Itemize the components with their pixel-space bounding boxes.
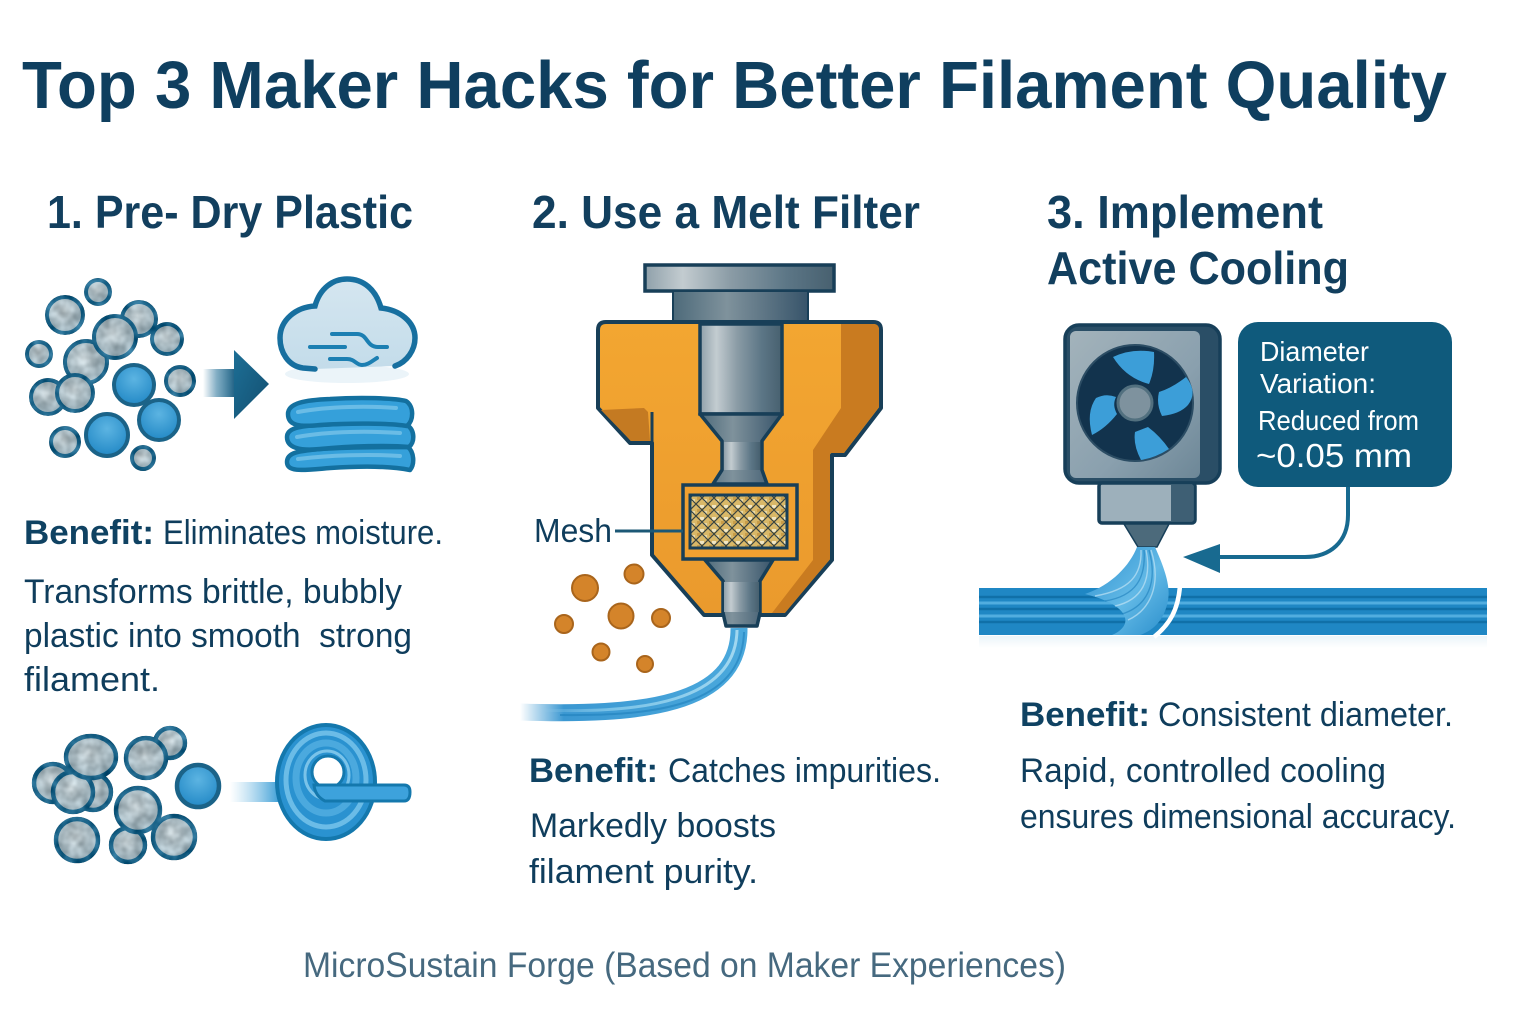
heading: step 2: 2. Use a Melt Filter [532, 186, 920, 238]
description text: melt filter: Markedly boosts [530, 807, 776, 845]
description text: pre-dry: Transforms brittle, bubbly [24, 573, 402, 611]
heading: step 3: 3. Implement [1047, 186, 1323, 238]
benefit text: impurities: Catches impurities. [668, 752, 941, 790]
icon: dried filament coil [287, 398, 413, 470]
panel: active cooling [979, 186, 1487, 836]
description text: melt filter: filament purity. [529, 853, 758, 891]
benefit text: moisture [24, 514, 443, 552]
description text: melt filter [529, 807, 776, 891]
panel: pre-dry plastic [24, 186, 443, 862]
callout: diameter variation: Variation: [1260, 368, 1376, 399]
icon: cooling fan [1065, 325, 1220, 547]
footer: source credit: MicroSustain Forge (Based on Maker Experiences) [303, 946, 1066, 985]
icon: extruded filament strand [520, 628, 744, 715]
arrow: drying direction [203, 350, 269, 419]
callout: diameter variation: Reduced from [1258, 405, 1419, 436]
icon: trapped impurities [555, 564, 670, 672]
icon: filament belt and cooled stream [979, 547, 1487, 648]
icon: cloud with vapour [280, 279, 415, 383]
description text: cooling: Rapid, controlled cooling [1020, 752, 1386, 790]
benefit text: diameter: Benefit: [1020, 696, 1150, 734]
description text: pre-dry: filament. [24, 661, 160, 699]
benefit text: impurities: Benefit: [529, 752, 658, 790]
benefit text: impurities [529, 752, 941, 790]
heading: step 3 [1047, 186, 1349, 294]
callout: diameter variation: Diameter [1260, 336, 1369, 367]
description text: cooling: ensures dimensional accuracy. [1020, 798, 1456, 836]
callout: diameter variation [1238, 322, 1452, 487]
callout: diameter variation: ~0.05 mm [1256, 437, 1412, 474]
icon: extruder nozzle with mesh [598, 265, 881, 626]
arrow: callout to filament [1183, 487, 1348, 573]
label: mesh: Mesh [534, 512, 612, 549]
benefit text: moisture: Benefit: [24, 514, 154, 552]
heading: step 1: 1. Pre- Dry Plastic [47, 186, 413, 238]
benefit text: diameter: Consistent diameter. [1158, 696, 1453, 734]
panel: melt filter [520, 186, 941, 891]
icon: finished filament spool [230, 725, 410, 839]
benefit text: diameter [1020, 696, 1453, 734]
description text: cooling [1020, 752, 1456, 836]
heading: step 3: Active Cooling [1047, 242, 1349, 294]
description text: pre-dry [24, 573, 412, 699]
title: Top 3 Maker Hacks for Better Filament Quality [22, 48, 1447, 123]
icon: wet pellets cluster [27, 280, 194, 469]
description text: pre-dry: plastic into smooth strong [24, 617, 412, 655]
benefit text: moisture: Eliminates moisture. [163, 514, 443, 552]
icon: clean pellets cluster [34, 728, 219, 862]
